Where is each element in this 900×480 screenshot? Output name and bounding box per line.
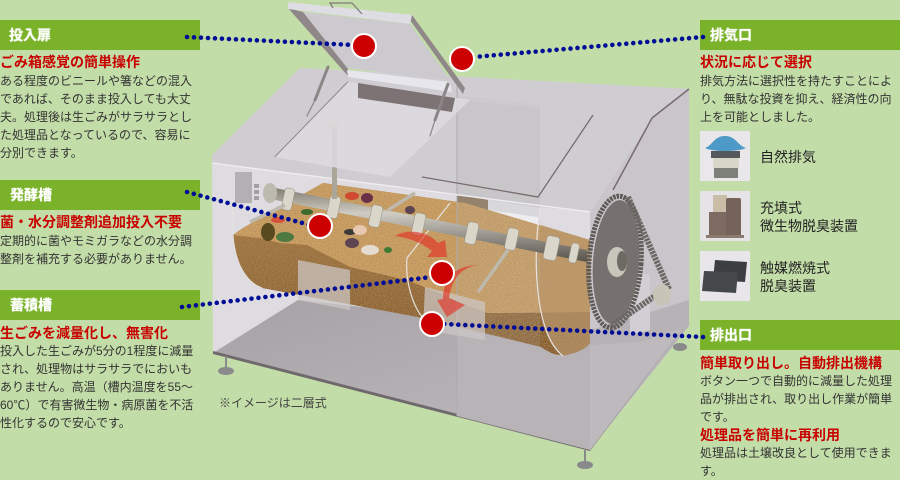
text: easy discharge: 品が排出され、取り出し作業が簡単 (700, 392, 892, 406)
exhaust thumbnail: natural vent (700, 131, 750, 181)
text: storage tank: 性化するので安心です。 (0, 416, 131, 430)
option label: catalytic deodorizer: 脱臭装置 (760, 278, 816, 294)
text: fermentation tank: 整剤を補充する必要がありません。 (0, 252, 192, 266)
red flow arrow: lower (437, 265, 480, 317)
heading: reuse: 処理品を簡単に再利用 (700, 427, 840, 443)
text: input door: 分別できます。 (0, 146, 83, 160)
text: input door: た処理品となっているので、容易に (0, 128, 191, 142)
text: storage tank (0, 344, 193, 430)
text: fermentation tank: 定期的に菌やモミガラなどの水分調 (0, 234, 192, 248)
heading: easy discharge: 簡単取り出し。自動排出機構 (700, 355, 882, 371)
text: storage tank: され、処理物はサラサラでにおいも (0, 362, 192, 376)
option label: microbial deodorizer (760, 200, 858, 234)
red markers (308, 34, 474, 336)
sprocket and chain (584, 194, 689, 345)
text: reuse: 処理品は土壌改良として使用できま (700, 446, 892, 460)
option label: microbial deodorizer: 微生物脱臭装置 (760, 218, 858, 234)
vertical rod (329, 122, 339, 199)
heading: storage tank: 生ごみを減量化し、無害化 (0, 325, 168, 341)
exhaust thumbnail: packed microbial deodorizer (700, 191, 750, 241)
heading: input door: ごみ箱感覚の簡単操作 (0, 54, 140, 70)
floor plate (213, 300, 689, 451)
label: storage tank: 蓄積槽 (10, 297, 52, 313)
text: fermentation tank (0, 234, 192, 266)
heading: fermentation tank: 菌・水分調整剤追加投入不要 (0, 214, 182, 230)
label: exhaust port (700, 20, 900, 50)
note: image caption: ※イメージは二層式 (219, 396, 327, 410)
text: easy discharge: です。 (700, 410, 735, 424)
opened input lid (288, 2, 465, 94)
text: exhaust port: 上を可能としました。 (700, 110, 820, 124)
dotted leader lines (182, 37, 703, 337)
text: storage tank: 60℃）で有害微生物・病原菌を不活 (0, 398, 193, 412)
text: input door: であれば、そのまま投入しても大丈 (0, 92, 191, 106)
text: storage tank: ありません。高温（槽内温度を55～ (0, 380, 193, 394)
text: easy discharge (700, 374, 892, 424)
label: discharge port: 排出口 (710, 327, 752, 343)
label: storage tank (0, 290, 200, 320)
control panel (235, 172, 259, 203)
organic waste material in fermentation tank (233, 183, 590, 356)
red flow arrow: upper (395, 232, 447, 257)
label: fermentation tank: 発酵槽 (10, 187, 52, 203)
text: easy discharge: ボタン一つで自動的に減量した処理 (700, 374, 892, 388)
option label: catalytic deodorizer (760, 260, 830, 294)
label: discharge port (700, 320, 900, 350)
gas struts (307, 67, 448, 136)
label: input door (0, 20, 200, 50)
text: exhaust port (700, 74, 892, 124)
option label: natural vent: 自然排気 (760, 149, 816, 165)
label: input door: 投入扉 (9, 27, 51, 43)
option label: microbial deodorizer: 充填式 (760, 200, 802, 216)
heading: exhaust port: 状況に応じて選択 (700, 54, 812, 70)
mixing shaft with paddles (250, 183, 587, 292)
text: reuse (700, 446, 892, 478)
upper opening panel (275, 82, 470, 177)
option label: catalytic deodorizer: 触媒燃焼式 (760, 260, 830, 276)
food scraps (261, 192, 415, 255)
text: exhaust port: り、無駄な投資を抑え、経済性の向 (700, 92, 892, 106)
label: fermentation tank (0, 180, 200, 210)
text: exhaust port: 排気方法に選択性を持たすことによ (700, 74, 892, 88)
cabinet body (212, 68, 689, 450)
text: input door: 夫。処理後は生ごみがサラサラとし (0, 110, 192, 124)
top hatch opening outlines (275, 82, 689, 197)
text: input door: ある程度のビニールや箸などの混入 (0, 74, 192, 88)
exhaust thumbnail: catalytic filters (700, 251, 750, 301)
text: storage tank: 投入した生ごみが5分の1程度に減量 (0, 344, 193, 358)
glass front panel overlays (212, 80, 590, 440)
feet (218, 343, 687, 469)
text: reuse: す。 (700, 464, 723, 478)
lid opening dark recess (358, 83, 455, 112)
label: exhaust port: 排気口 (710, 27, 752, 43)
text: input door (0, 74, 192, 160)
